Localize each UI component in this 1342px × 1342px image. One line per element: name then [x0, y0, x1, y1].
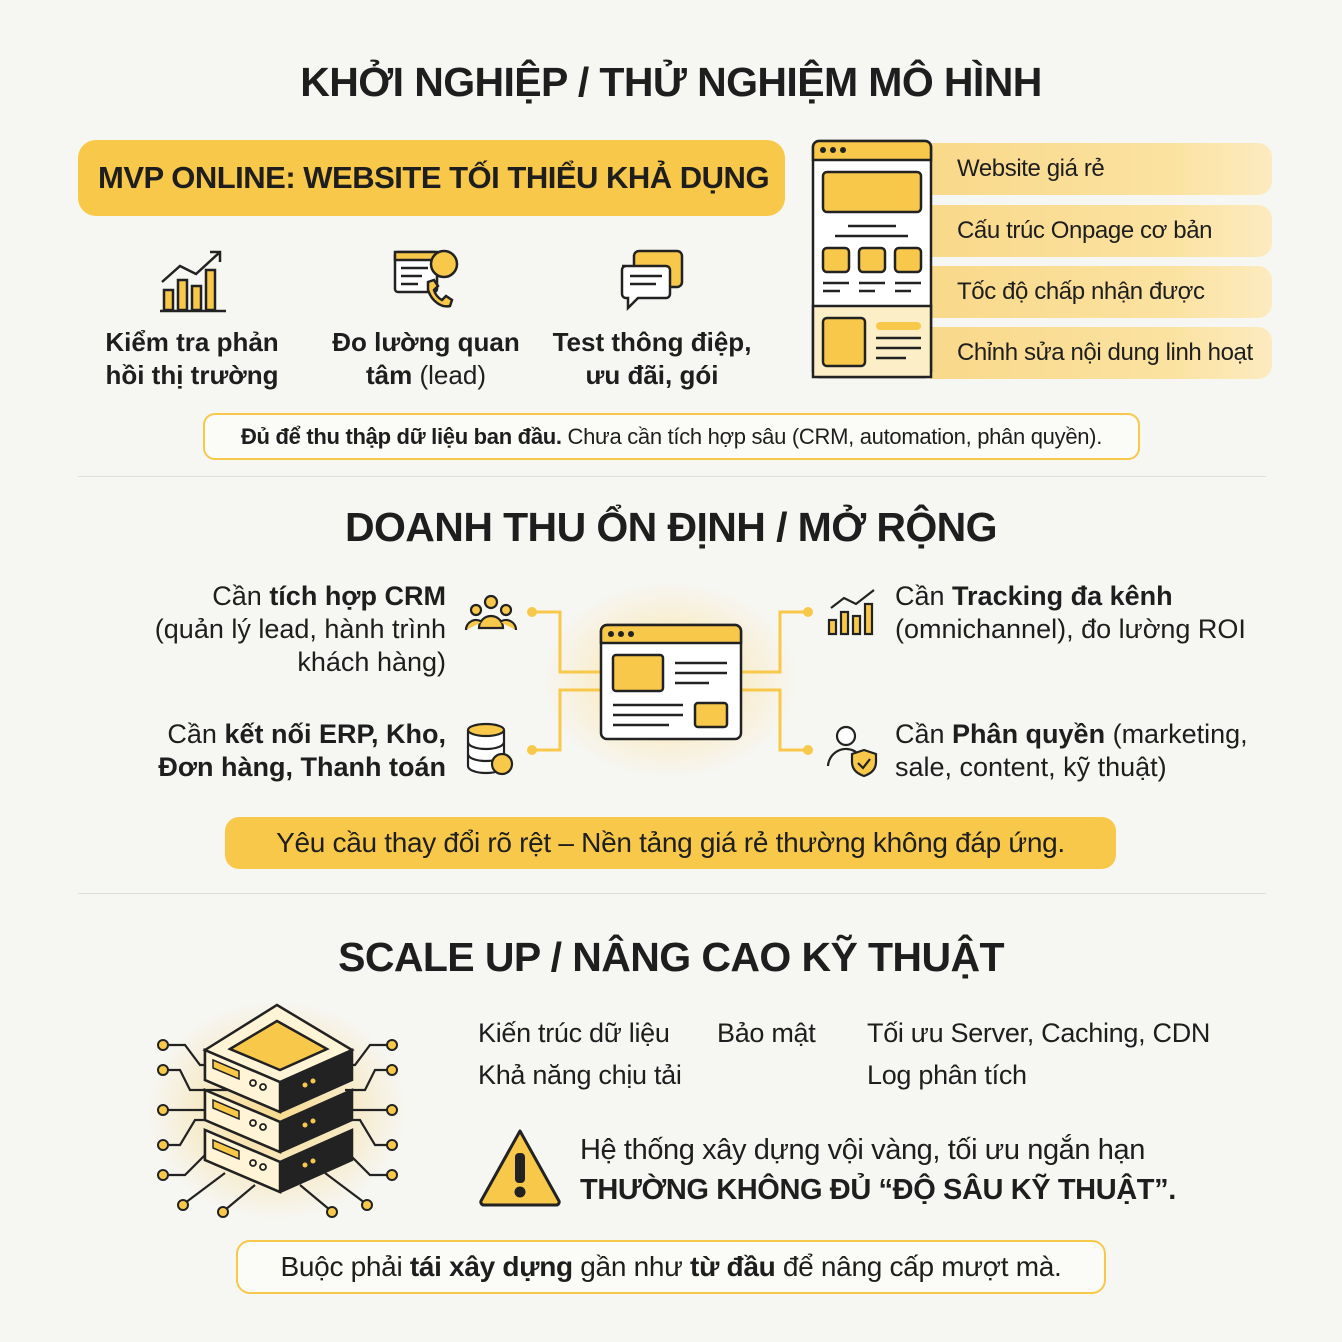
text: warning message: Hệ thống xây dựng vội vàng, tối ưu ngắn hạn [580, 1134, 1145, 1166]
note: initial data: Đủ để thu thập dữ liệu ban đầu. Chưa cần tích hợp sâu (CRM, automation, phân quyền). [241, 424, 1102, 449]
icon: database [466, 722, 514, 776]
text: CRM [155, 581, 446, 677]
icon: user shield [826, 726, 878, 778]
text grid: technical items: Bảo mật [717, 1018, 815, 1048]
title: section 3: SCALE UP / NÂNG CAO KỸ THUẬT [338, 934, 1004, 980]
text grid: technical items: Khả năng chịu tải [478, 1060, 682, 1090]
label: market check: hồi thị trường [105, 360, 279, 390]
text: CRM: Cần tích hợp CRM [212, 581, 446, 611]
text: CRM: (quản lý lead, hành trình [155, 614, 446, 644]
icon: warning [479, 1129, 561, 1206]
row 3 [930, 266, 1272, 318]
label: lead measure [332, 327, 520, 390]
label: market check: Kiểm tra phản [105, 327, 279, 357]
banner: MVP online [78, 140, 785, 216]
callout: rebuild [236, 1240, 1106, 1294]
callout: rebuild: Buộc phải tái xây dựng gần như từ đầu để nâng cấp mượt mà. [281, 1251, 1061, 1282]
row 4 [930, 327, 1272, 379]
list: MVP features [930, 143, 1272, 379]
label: test message [552, 327, 751, 390]
text: warning message: THƯỜNG KHÔNG ĐỦ “ĐỘ SÂU KỸ THUẬT”. [580, 1174, 1176, 1206]
text: ERP: Đơn hàng, Thanh toán [158, 752, 446, 782]
icon: tracking chart [828, 589, 875, 636]
label: market check [105, 327, 279, 390]
text: ERP: Cần kết nối ERP, Kho, [167, 719, 446, 749]
text: permissions [895, 719, 1248, 782]
icon: lead measurement [394, 250, 458, 308]
label: lead measure: Đo lường quan [332, 327, 520, 357]
text grid: technical items: Kiến trúc dữ liệu [478, 1018, 670, 1048]
banner: MVP online: MVP ONLINE: WEBSITE TỐI THIỂU KHẢ DỤNG [98, 160, 769, 195]
title: section 2: DOANH THU ỔN ĐỊNH / MỞ RỘNG [345, 504, 997, 550]
text: tracking: (omnichannel), đo lường ROI [895, 614, 1246, 644]
text: permissions: Cần Phân quyền (marketing, [895, 719, 1248, 749]
icon: server stack [157, 1004, 398, 1218]
icon: phone mockup [812, 140, 932, 378]
row 4: Chỉnh sửa nội dung linh hoạt [957, 339, 1253, 366]
text grid: technical items: Log phân tích [867, 1060, 1027, 1090]
icon: people [464, 594, 518, 630]
row 3: Tốc độ chấp nhận được [957, 278, 1205, 305]
text: tracking [895, 581, 1246, 644]
icon: chat messages [620, 250, 684, 311]
row 1: Website giá rẻ [957, 155, 1104, 182]
text: ERP [158, 719, 446, 782]
connectors [527, 607, 813, 755]
title: section 1: KHỞI NGHIỆP / THỬ NGHIỆM MÔ HÌNH [300, 59, 1042, 105]
text: warning message [580, 1134, 1176, 1206]
glow behind browser [540, 580, 800, 780]
banner: change requirement: Yêu cầu thay đổi rõ rệt – Nền tảng giá rẻ thường không đáp ứng. [276, 827, 1065, 858]
note: initial data [203, 413, 1140, 460]
text: tracking: Cần Tracking đa kênh [895, 581, 1173, 611]
text grid: technical items: Tối ưu Server, Caching, CDN [867, 1018, 1210, 1048]
icon: growth chart [160, 250, 226, 312]
label: test message: ưu đãi, gói [586, 360, 718, 390]
label: test message: Test thông điệp, [553, 327, 751, 357]
banner: change requirement [225, 817, 1116, 869]
row 1 [930, 143, 1272, 195]
row 2: Cấu trúc Onpage cơ bản [957, 217, 1212, 244]
icon: central browser [600, 624, 742, 740]
label: lead measure: tâm (lead) [366, 360, 486, 390]
row 2 [930, 205, 1272, 257]
text grid: technical items [478, 1018, 1210, 1090]
text: CRM: khách hàng) [297, 647, 446, 677]
text: permissions: sale, content, kỹ thuật) [895, 752, 1167, 782]
